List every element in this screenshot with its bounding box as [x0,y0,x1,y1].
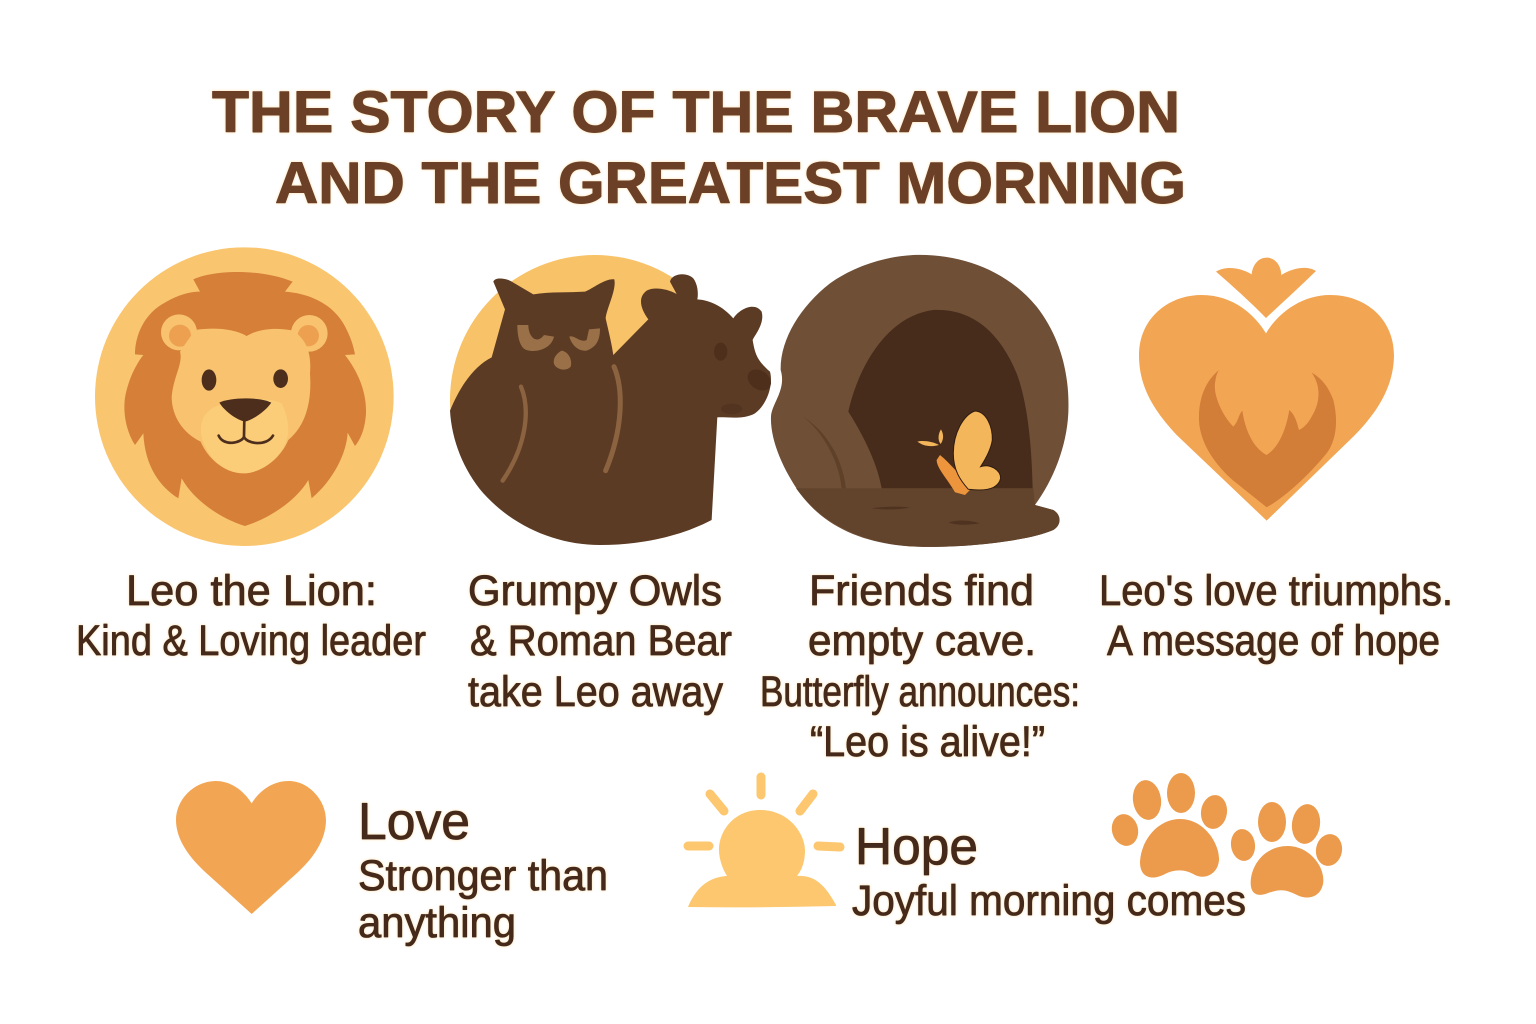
text: Love [358,793,608,947]
caption: Leo: Kind & Loving leader [76,617,426,665]
caption: triumph [1099,567,1453,665]
caption: Owls and Bear: Grumpy Owls [468,567,722,615]
icon: rising sun [688,777,840,907]
caption: Owls and Bear [468,567,732,716]
title: AND THE GREATEST MORNING [275,151,1186,216]
text: Hope [852,818,1246,925]
caption: Owls and Bear: & Roman Bear [470,617,732,665]
icon: lion [95,247,394,546]
icon: cave and butterfly [771,255,1068,547]
panel: Leo the Lion [76,247,426,665]
caption: Leo [76,567,426,665]
text: Hope: Joyful morning comes [852,877,1246,925]
caption: triumph: A message of hope [1107,617,1440,665]
text: Love: anything [358,899,516,947]
icon: paw prints [1108,773,1345,897]
icon: heart [176,781,326,914]
caption: triumph: Leo's love triumphs. [1099,567,1453,615]
title [212,80,1186,216]
caption: Owls and Bear: take Leo away [468,668,723,716]
panel: Owls and Bear [450,255,775,716]
caption: cave: Friends find [809,567,1034,615]
caption: Leo: Leo the Lion: [126,567,377,615]
panel: Hope [688,777,1246,925]
title: THE STORY OF THE BRAVE LION [212,80,1180,145]
text: Hope: Hope [855,818,978,876]
caption: cave: “Leo is alive!” [810,718,1045,766]
caption: cave [760,567,1080,766]
panel: Love [176,781,608,947]
panel: love triumphs [1099,258,1453,665]
icon: owl and bear [450,255,775,545]
caption: cave: empty cave. [808,617,1036,665]
caption: cave: Butterfly announces: [760,668,1080,716]
panel: empty cave [760,255,1080,766]
icon: heart with flame and crown [1139,258,1394,521]
text: Love: Stronger than [358,852,608,900]
text: Love: Love [358,793,470,851]
